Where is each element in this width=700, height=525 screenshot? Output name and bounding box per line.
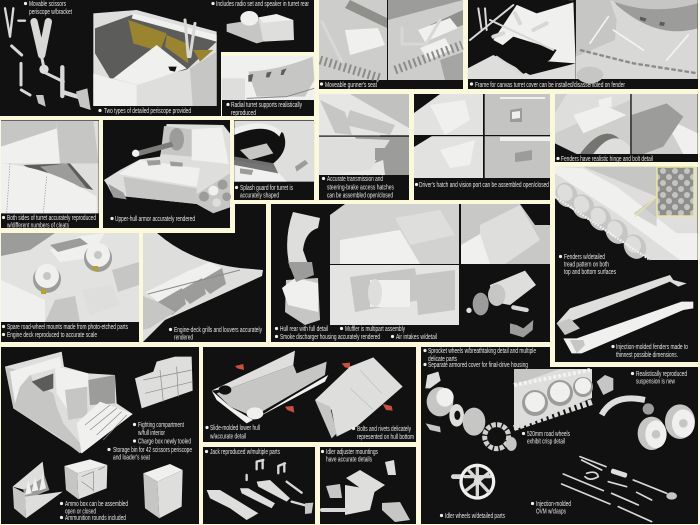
panel: idler adjuster [320,447,416,524]
icon: sprocket exploded parts [425,372,517,451]
image: turret sides [1,121,99,213]
caption: armored cover: Separate armored cover for final-drive housing [428,360,528,369]
panel: transmission hatches [319,94,409,200]
caption: driver's hatch: Driver's hatch and vision port can be assembled open/closed [419,180,549,189]
image: tread pattern inset [657,167,694,216]
caption: jack: Jack reproduced w/multiple parts [210,447,280,456]
panel: splash guard [234,120,314,200]
caption: transmission hatches [322,174,394,200]
image: hatch and vision port [414,94,550,178]
caption: ammo box [60,499,128,516]
caption: OVM: Injection-molded [536,499,571,508]
caption: radial supports [226,100,302,117]
panel: upper hull armor [103,120,231,228]
caption: fender hinges [556,154,653,163]
panel: lower hull [203,347,416,442]
caption: sprocket wheels: Sprocket wheels w/breathtaking detail and multiple [428,346,536,355]
caption: splash guard: accurately shaped [240,190,279,200]
caption: ammo box: open or closed [65,506,96,516]
icon: idler wheel [453,464,495,500]
caption: bolts and rivets: Bolts and rivets delicately [357,424,411,433]
panel: fender hinges [555,94,698,163]
image: tank [104,124,231,213]
caption: engine-deck grills [169,325,262,342]
caption: spare wheels and deck: Spare road-wheel mounts made from photo-etched parts [7,322,128,331]
image: engine-deck louvers [143,233,263,342]
image: hull side wheels [551,167,698,263]
image: hatch views [319,94,409,175]
caption: idler wheels: Idler wheels w/detailed parts [445,511,505,520]
image: hinge and bolt views [555,94,698,154]
caption: injection-molded fenders [611,342,688,359]
panel: engine-deck grills [143,204,266,342]
caption: fender tread: Fenders w/detailed [564,252,605,261]
caption: movable periscope [24,0,73,16]
image: fender view right [576,0,698,83]
caption: radio set [211,0,309,8]
caption: hull rear: Hull rear with full detail [280,324,328,333]
caption: frame for canvas cover [470,80,625,89]
image: compartment interior [0,260,133,453]
caption: bolts and rivets: represented on hull bottom [357,432,414,441]
panel: fenders with tread pattern [551,167,698,362]
image: slide-molded hull [212,351,350,423]
caption: movable periscope: periscope w/bracket [29,7,73,16]
image: storage bin [135,357,193,408]
image: seat views [319,0,463,80]
caption: periscope types [98,106,191,115]
caption: smoke discharger: Smoke discharger housing accurately rendered [280,332,380,341]
panel: both sides of turret [1,120,99,230]
icon: charge box [64,459,107,499]
caption: idler adjuster: have accurate details [326,454,372,464]
caption: slide-molded hull: Slide-molded lower hull [210,423,260,432]
panel: driver's hatch [414,94,550,200]
caption: transmission hatches: Accurate transmission and [327,174,383,183]
superstructure and hull silhouette [104,124,230,213]
caption: sprocket wheels [423,346,536,363]
panel: fighting compartment [0,260,199,524]
icon: suspension and twin wheels [597,375,695,450]
caption: suspension: suspension is new [636,376,675,386]
caption: fender tread: top and bottom surfaces [564,267,616,276]
image: hull rear parts [282,212,320,325]
caption: idler adjuster: Idler adjuster mountings [326,447,378,456]
caption: engine-deck grills: rendered [174,332,193,342]
caption: suspension [631,369,687,386]
image: periscope interior [93,10,217,106]
image: fender parts [557,275,693,353]
caption: charge box: Charge box newly tooled [138,436,191,446]
caption: turret sides: w/different numbers of cleats [6,220,69,230]
caption: slide-molded hull: w/accurate detail [209,432,246,440]
caption: spare wheels and deck [2,322,128,339]
caption: road wheels: 520mm road wheels [527,429,570,438]
caption: fighting compartment: Fighting compartment [138,420,185,429]
caption: hull rear [275,324,328,333]
caption: upper hull: Upper-hull armor accurately rendered [115,214,195,223]
caption: road wheels: exhibit crisp detail [527,436,565,446]
image: engine detail views [330,204,550,325]
image: turret ring [222,56,314,100]
caption: ammunition: Ammunition rounds included [65,513,126,522]
caption: muffler [340,324,405,333]
caption: radial supports: Radial turret supports realistically [231,100,302,109]
caption: splash guard [235,183,293,200]
panel: moveable gunner's seat [319,0,463,89]
panel: periscope and radio [0,0,314,116]
caption: idler adjuster [321,447,378,464]
caption: splash guard: Splash guard for turret is [240,183,293,192]
caption: turret sides [2,213,96,230]
image: engine deck [1,233,139,322]
panel: spare road-wheel mounts [1,233,139,342]
caption: turret sides: Both sides of turret accurately reproduced [7,213,96,222]
caption: ammo box: Ammo box can be assembled [65,499,128,508]
image: hull bottom [315,357,403,438]
panel: canvas turret cover frame [468,0,698,89]
caption: transmission hatches: can be assembled open/closed [327,190,393,200]
image: frame detail left [468,0,576,79]
caption: air intakes: Air intakes w/detail [396,332,437,341]
caption: bolts and rivets [352,424,414,441]
caption: armored cover [423,360,528,369]
panel: jack parts [203,447,315,524]
caption: fighting compartment: w/full interior [137,428,165,437]
icon: OVM tools [562,457,677,522]
caption: engine-deck grills: Engine-deck grills and louvers accurately [174,325,262,334]
caption: storage bin: Storage bin for 42 scissors periscope [113,445,192,454]
panel: radial turret supports [222,56,314,117]
caption: road wheels [522,429,570,446]
image: muffler parts [466,271,536,337]
caption: gunner's seat: Moveable gunner's seat [325,80,378,89]
icon: ammo box [13,462,63,518]
caption: OVM: OVM w/clasps [536,506,566,516]
caption: fighting compartment [133,420,185,437]
image: splash guard [234,121,314,182]
caption: idler wheels [440,511,505,520]
caption: OVM [531,499,571,516]
caption: air intakes [391,332,437,341]
caption: smoke discharger [275,332,380,341]
caption: storage bin [107,445,192,462]
panel: sprockets, road wheels and OVM [421,346,698,524]
icon: scissors periscope parts [5,8,91,110]
caption: storage bin: and loader's seat [113,452,151,462]
caption: transmission hatches: steering-brake access hatches [327,182,394,192]
image: jack parts [207,460,313,520]
caption: periscope types: Two types of detailed periscope provided [104,106,191,115]
caption: muffler: Muffler is multipart assembly [345,324,405,333]
caption: ammunition [60,513,126,522]
icon: radio set and speaker [227,11,294,43]
caption: fender tread [559,252,616,276]
caption: charge box [133,436,191,446]
image: adjuster parts [322,460,410,522]
caption: fender tread: tread pattern on both [564,260,609,268]
caption: gunner's seat [320,80,378,89]
caption: slide-molded hull [205,423,260,440]
icon: storage box [143,464,183,518]
caption: sprocket wheels: delicate parts [428,354,457,363]
panel: hull rear and muffler [271,204,550,342]
caption: radial supports: reproduced [231,108,256,117]
image: road wheels on hull [514,369,593,430]
caption: spare wheels and deck: Engine deck reproduced to accurate scale [7,330,97,339]
